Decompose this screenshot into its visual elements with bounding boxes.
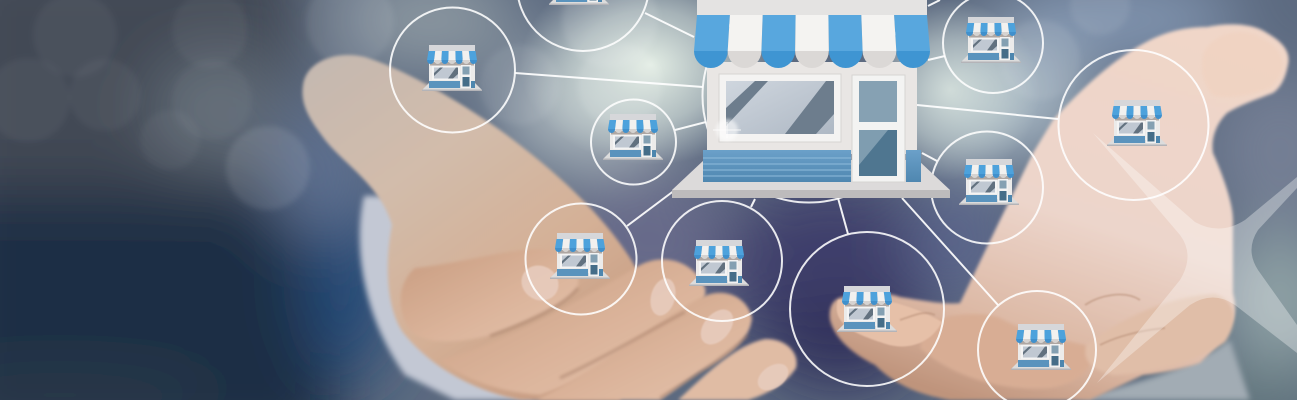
network circles [390, 0, 1208, 400]
ring finger [535, 293, 752, 400]
index finger [401, 249, 578, 341]
sleeve: right cuff bottom [1070, 340, 1250, 400]
fingernails [515, 259, 793, 396]
right finger [1085, 294, 1234, 375]
lower middle fingers [920, 314, 1091, 389]
small store icons [422, 0, 1167, 370]
fingertip pad [837, 298, 942, 346]
middle finger [440, 259, 705, 395]
left hand [302, 55, 797, 400]
X logo watermark [1093, 133, 1297, 383]
main storefront [672, 0, 950, 198]
palm and thumb [302, 55, 640, 400]
thumb fold highlight [1202, 32, 1282, 97]
little finger [678, 339, 797, 400]
lens flare [713, 119, 741, 141]
palm and thumb [830, 24, 1289, 400]
right hand [830, 24, 1289, 400]
palm creases [900, 295, 1165, 345]
bokeh light spots [0, 0, 1130, 210]
sleeve: left cuff [360, 196, 540, 400]
finger creases [490, 288, 748, 398]
connector lines [515, 0, 1058, 305]
